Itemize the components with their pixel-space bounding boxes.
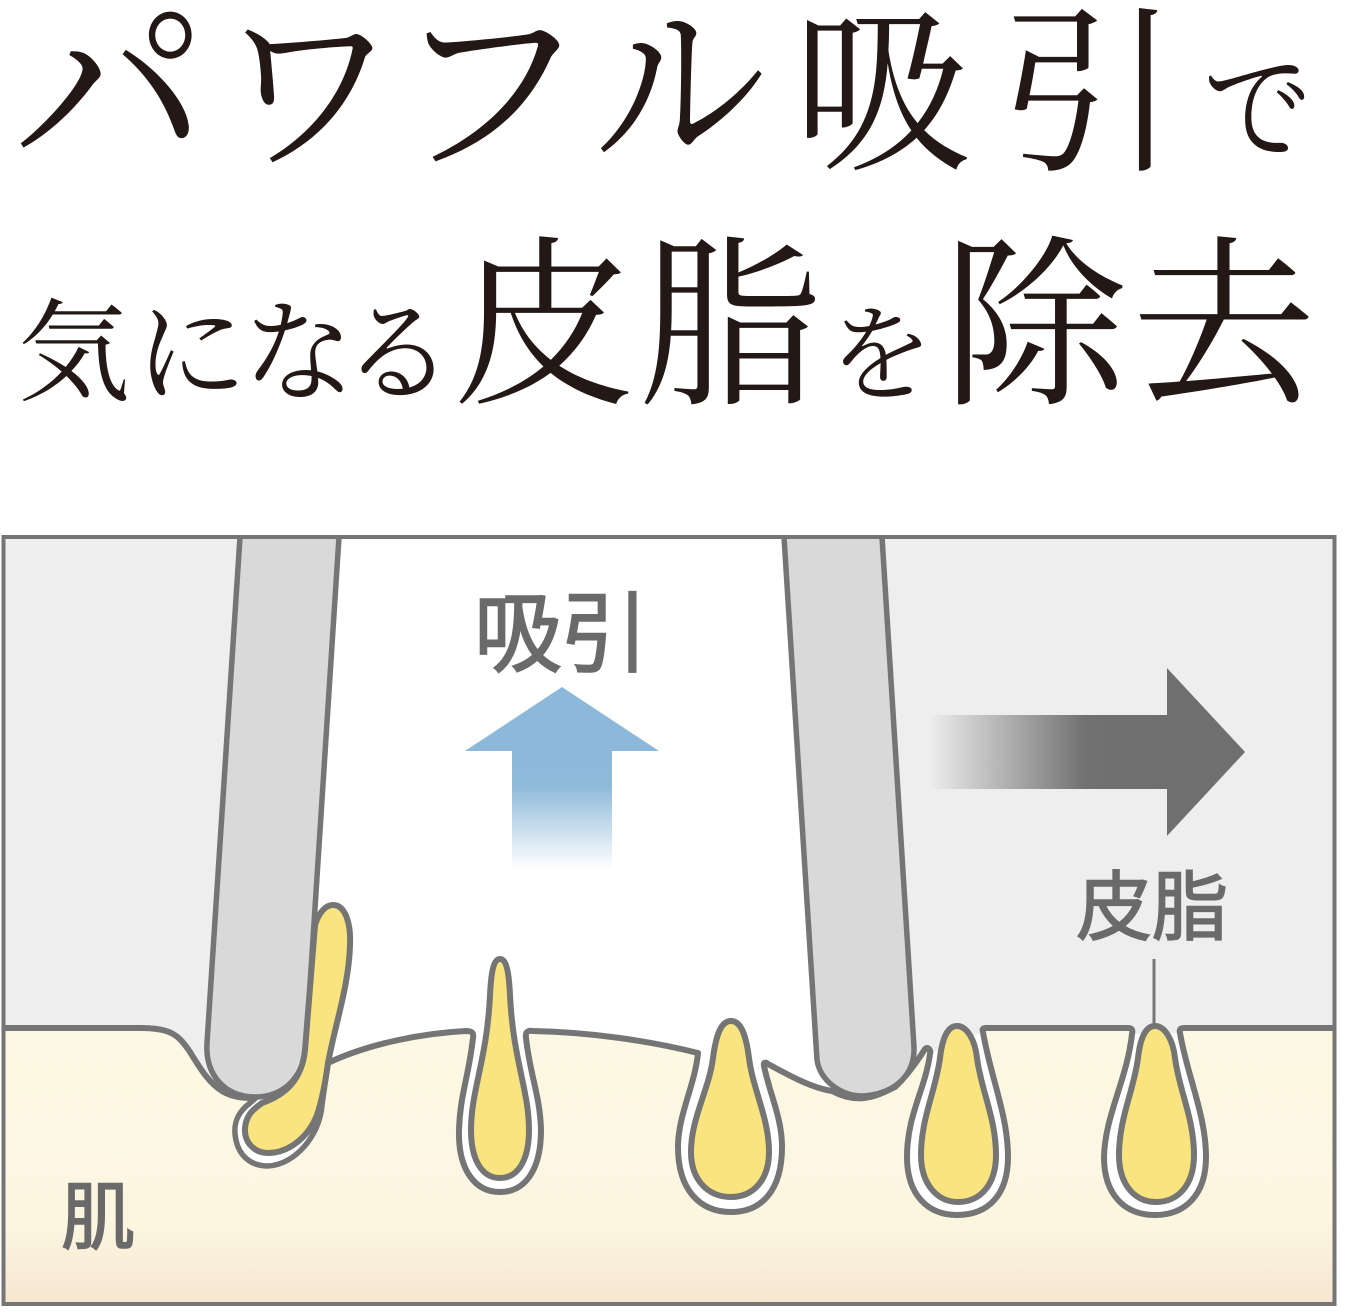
title: line 1: で [1203, 44, 1312, 178]
arrow: suction up [465, 687, 659, 869]
title: line 2 [18, 226, 1316, 430]
skin outline [3, 1028, 1335, 1215]
sebum: pore 5 [1119, 1026, 1194, 1202]
panel: suction diagram [3, 537, 1335, 1304]
label: sebum: 皮脂 [1076, 866, 1228, 951]
nozzle: left [207, 537, 339, 1097]
label: suction: 吸引 [474, 585, 649, 684]
pore: left, white lining [235, 1060, 328, 1166]
panel border [4, 537, 1334, 1304]
sebum: pore 3 [691, 1021, 769, 1197]
title: line 2: を [829, 299, 933, 414]
title: line 1: ワ [218, 0, 398, 196]
skin [3, 1028, 1335, 1304]
suction channel [255, 537, 870, 1100]
title: line 1: 吸 [793, 0, 970, 195]
sebum: pore 2 [471, 959, 529, 1178]
pores: white fill [459, 1032, 1206, 1215]
leader line [1152, 959, 1156, 1024]
nozzle: right [784, 537, 914, 1096]
sebum: on nozzle [245, 905, 350, 1153]
sebum: pore 4 [921, 1026, 996, 1202]
title: line 2: 皮脂 [452, 226, 822, 430]
title: line 2: 除去 [943, 226, 1316, 430]
title: line 1: 引 [998, 0, 1178, 196]
panel background [3, 537, 1335, 1304]
label: skin: 肌 [61, 1176, 135, 1259]
arrow: sebum movement right [931, 668, 1245, 836]
title: line 2: 気になる [18, 293, 454, 417]
title: line 1 [13, 0, 1312, 213]
